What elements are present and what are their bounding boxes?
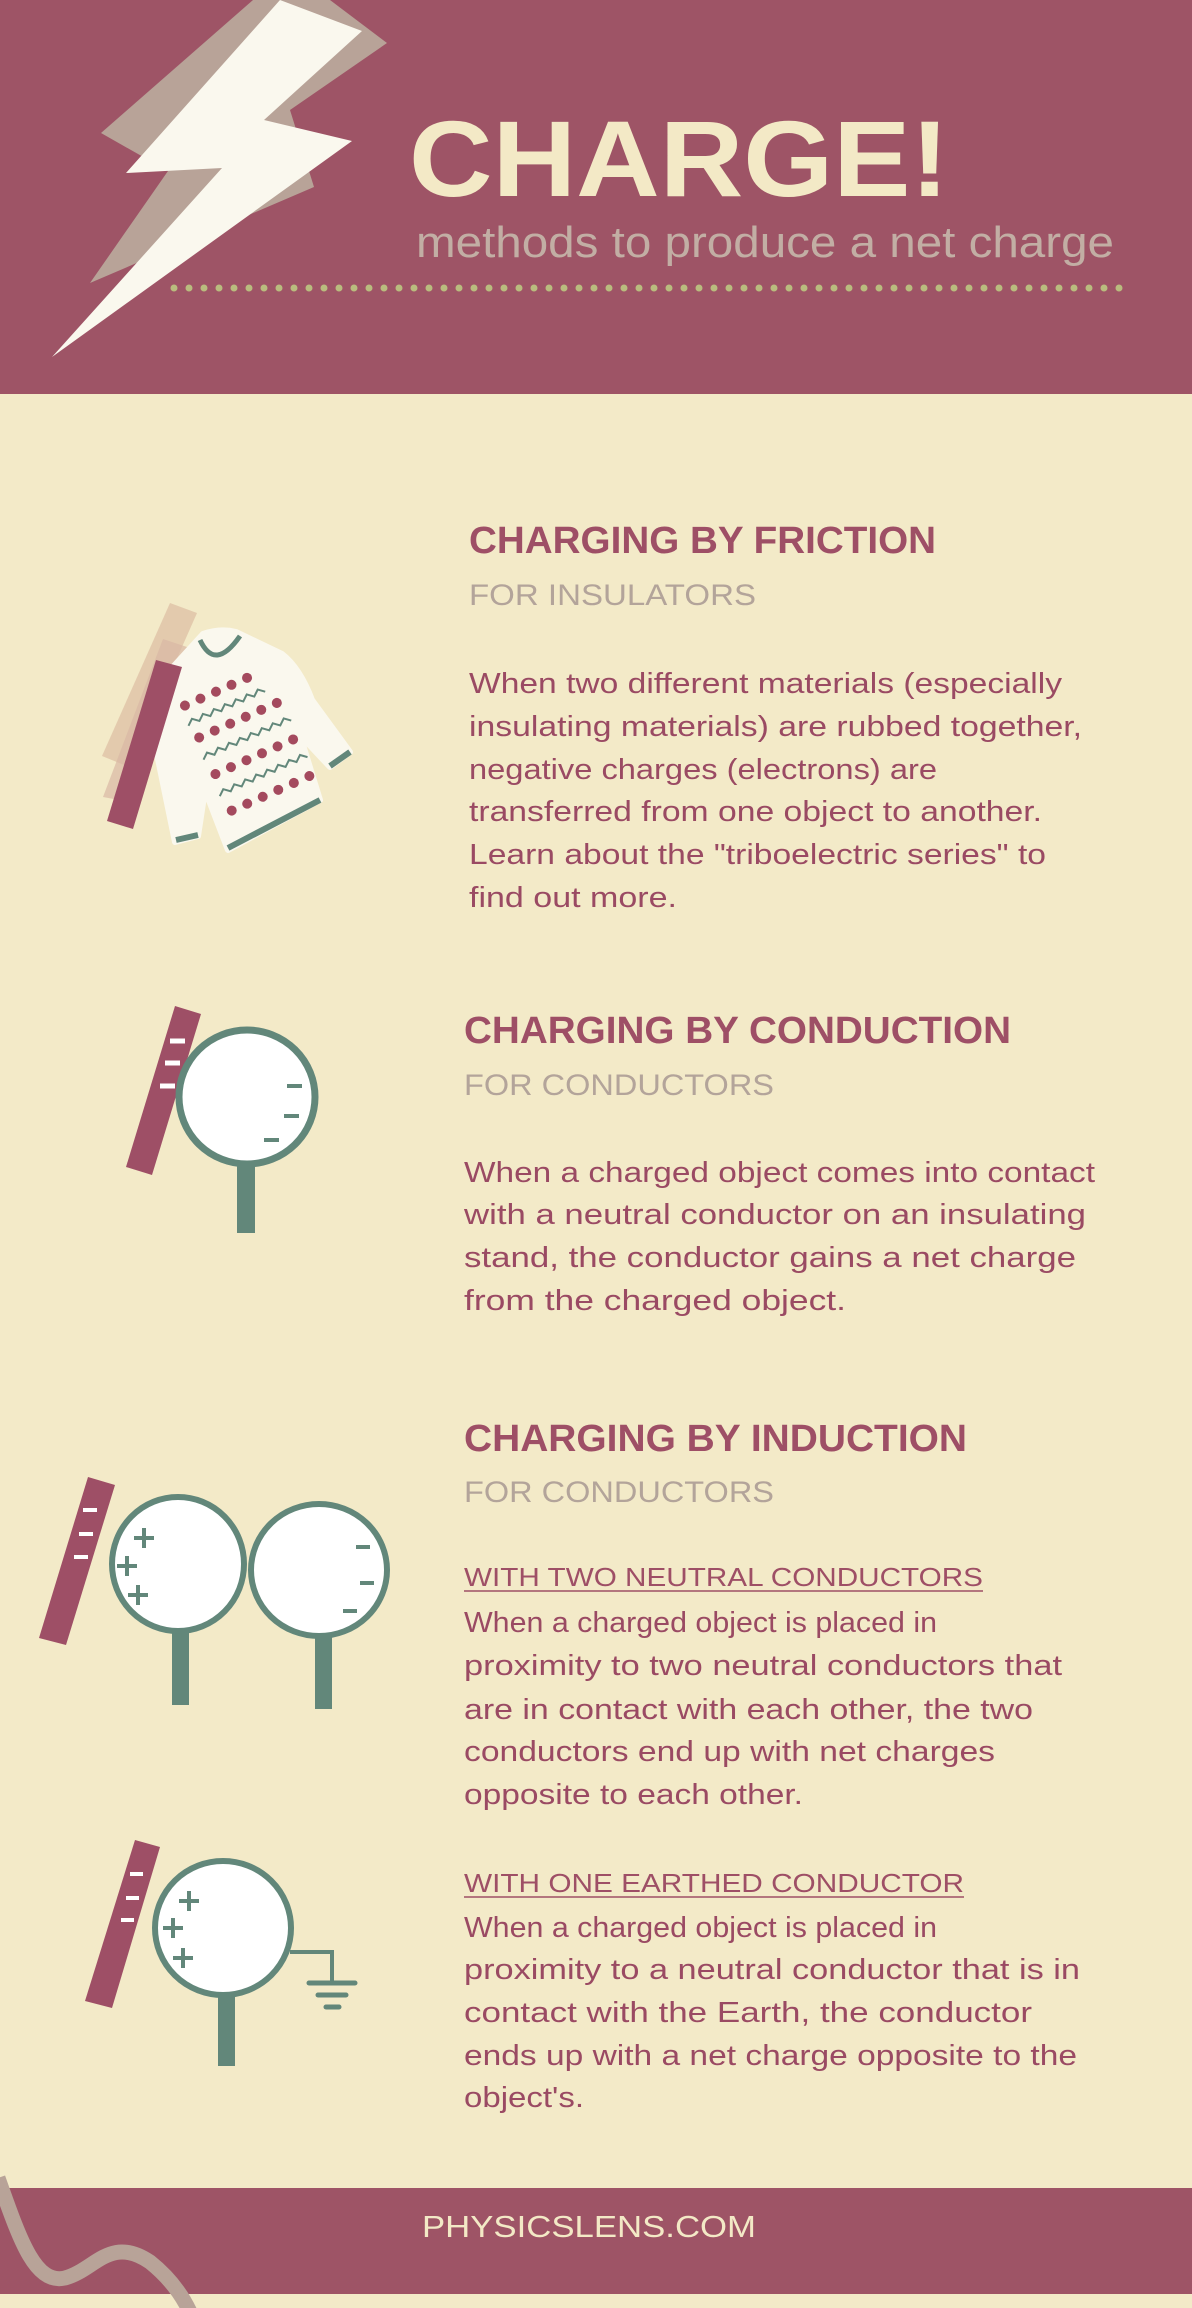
footer text: PHYSICSLENS.COM [422,2209,756,2244]
icon: induction with two conductors [39,1477,387,1709]
text: friction body: find out more. [469,882,677,914]
text: friction body: negative charges (electrons) are [469,754,937,786]
icon: induction with earthed conductor [85,1840,355,2066]
subheading: conductors: FOR CONDUCTORS [464,1476,774,1509]
header band [0,0,1192,394]
text: earthed body: When a charged object is placed in [464,1912,937,1944]
text: friction body [469,668,1082,914]
text: conduction body [463,1157,1095,1317]
subheading: conductors: FOR CONDUCTORS [464,1069,774,1102]
heading: induction: CHARGING BY INDUCTION [464,1418,967,1460]
text: friction body: Learn about the "triboelectric series" to [469,839,1046,871]
heading: friction: CHARGING BY FRICTION [469,520,936,562]
sweater [150,630,350,850]
text: earthed body [464,1912,1080,2114]
text: two conductors body: When a charged object is placed in [464,1607,937,1639]
subheading: two neutral conductors: WITH TWO NEUTRAL CONDUCTORS [464,1562,983,1592]
icon: rod rubbing sweater [102,603,350,850]
text: conduction body: with a neutral conductor on an insulating [463,1199,1086,1231]
text: two conductors body: proximity to two neutral conductors that [464,1650,1062,1682]
text: earthed body: proximity to a neutral conductor that is in [464,1954,1080,1986]
text: friction body: transferred from one object to another. [469,796,1042,828]
subheading: insulators: FOR INSULATORS [469,579,756,612]
footer band [0,2178,1192,2308]
text: two conductors body: opposite to each other. [464,1779,803,1811]
text: conduction body: from the charged object. [464,1285,846,1317]
text: two conductors body: conductors end up with net charges [464,1736,995,1768]
text: earthed body: object's. [464,2082,584,2114]
subheading: earthed conductor: WITH ONE EARTHED CONDUCTOR [464,1868,964,1898]
text: friction body: When two different materials (especially [469,668,1063,700]
text: two conductors body: are in contact with each other, the two [464,1694,1033,1726]
text: two conductors body [464,1607,1062,1811]
text: friction body: insulating materials) are rubbed together, [469,711,1082,743]
heading: conduction: CHARGING BY CONDUCTION [464,1010,1011,1052]
text: conduction body: When a charged object comes into contact [464,1157,1095,1189]
title: CHARGE! [409,98,949,219]
icon: lightning bolt [52,0,387,357]
text: conduction body: stand, the conductor gains a net charge [464,1242,1076,1274]
subtitle: methods to produce a net charge [416,218,1114,267]
text: earthed body: contact with the Earth, the conductor [464,1997,1032,2029]
icon: conduction [126,1006,315,1233]
text: earthed body: ends up with a net charge opposite to the [464,2040,1077,2072]
